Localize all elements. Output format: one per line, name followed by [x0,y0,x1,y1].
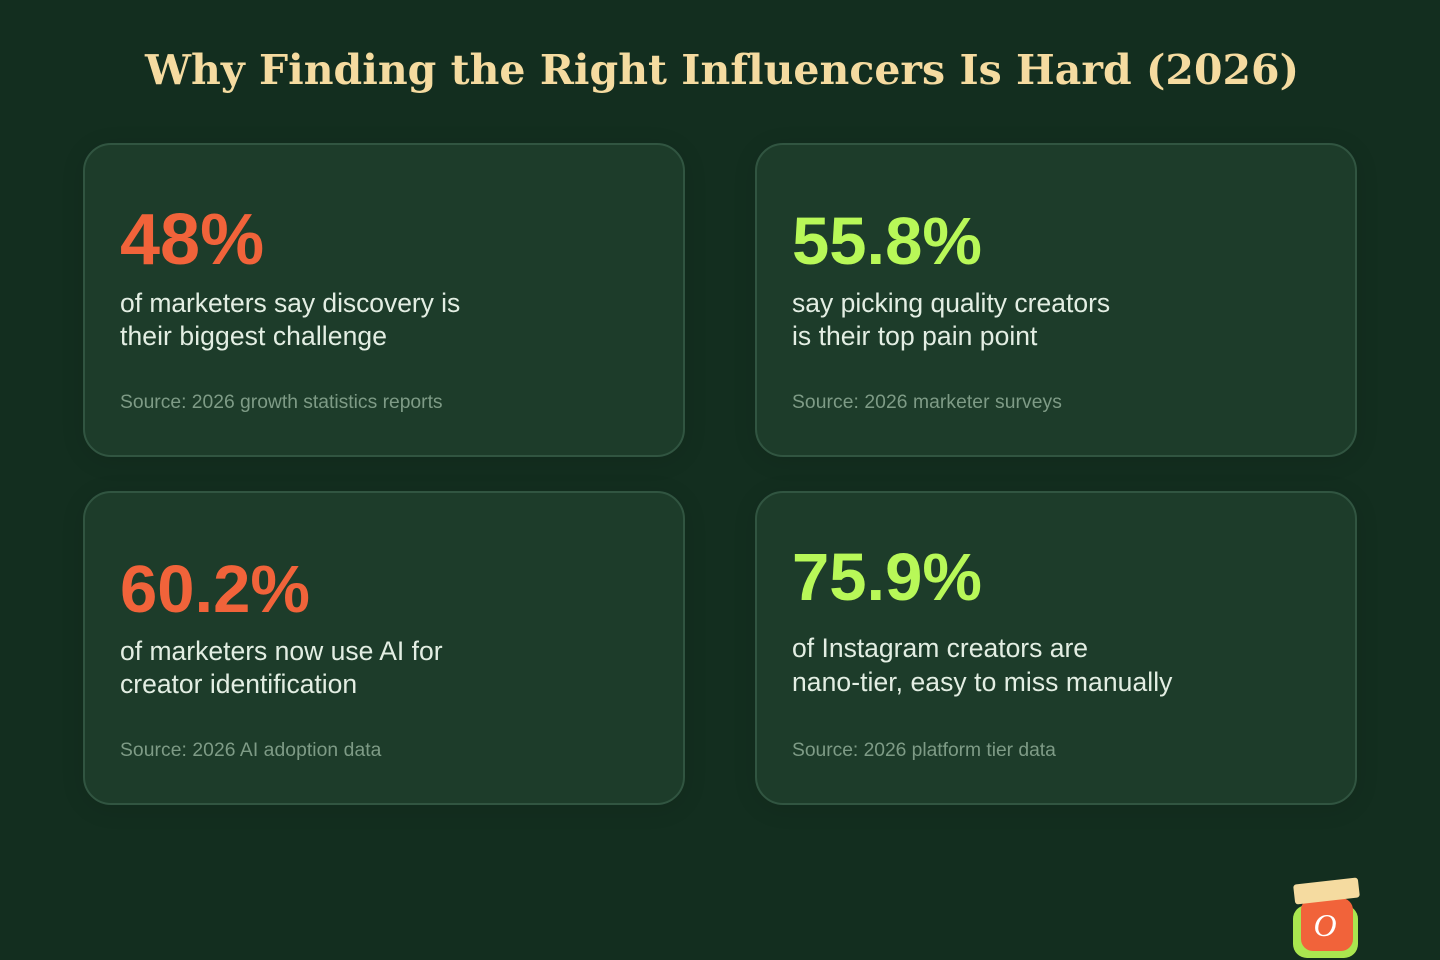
description [120,288,460,351]
source: Source: 2026 AI adoption data [120,740,381,761]
stat: 55.8%: 55.8% [792,204,982,279]
stat: 75.9%: 75.9% [792,540,982,615]
description: nano-tier, easy to miss manually [792,667,1172,697]
source: Source: 2026 platform tier data [792,740,1056,761]
title: Why Finding the Right Influencers Is Hard (2026) [145,46,1299,94]
description: of marketers say discovery is [120,288,460,318]
icon: logo jar: O [1313,907,1337,943]
source: Source: 2026 growth statistics reports [120,392,443,413]
stat: 48%: 48% [120,200,264,280]
icon: logo jar [1293,878,1360,958]
description: say picking quality creators [792,288,1110,318]
description [792,633,1172,697]
description [120,636,443,699]
panel: nano-tier creators [755,491,1357,805]
description: creator identification [120,669,357,699]
description: is their top pain point [792,321,1037,351]
description [792,288,1110,351]
panel: AI adoption [83,491,685,805]
panel: discovery challenge [83,143,685,457]
description: of marketers now use AI for [120,636,443,666]
description: of Instagram creators are [792,633,1088,663]
stat: 60.2%: 60.2% [120,552,310,627]
description: their biggest challenge [120,321,387,351]
panel: quality creators [755,143,1357,457]
source: Source: 2026 marketer surveys [792,392,1062,413]
